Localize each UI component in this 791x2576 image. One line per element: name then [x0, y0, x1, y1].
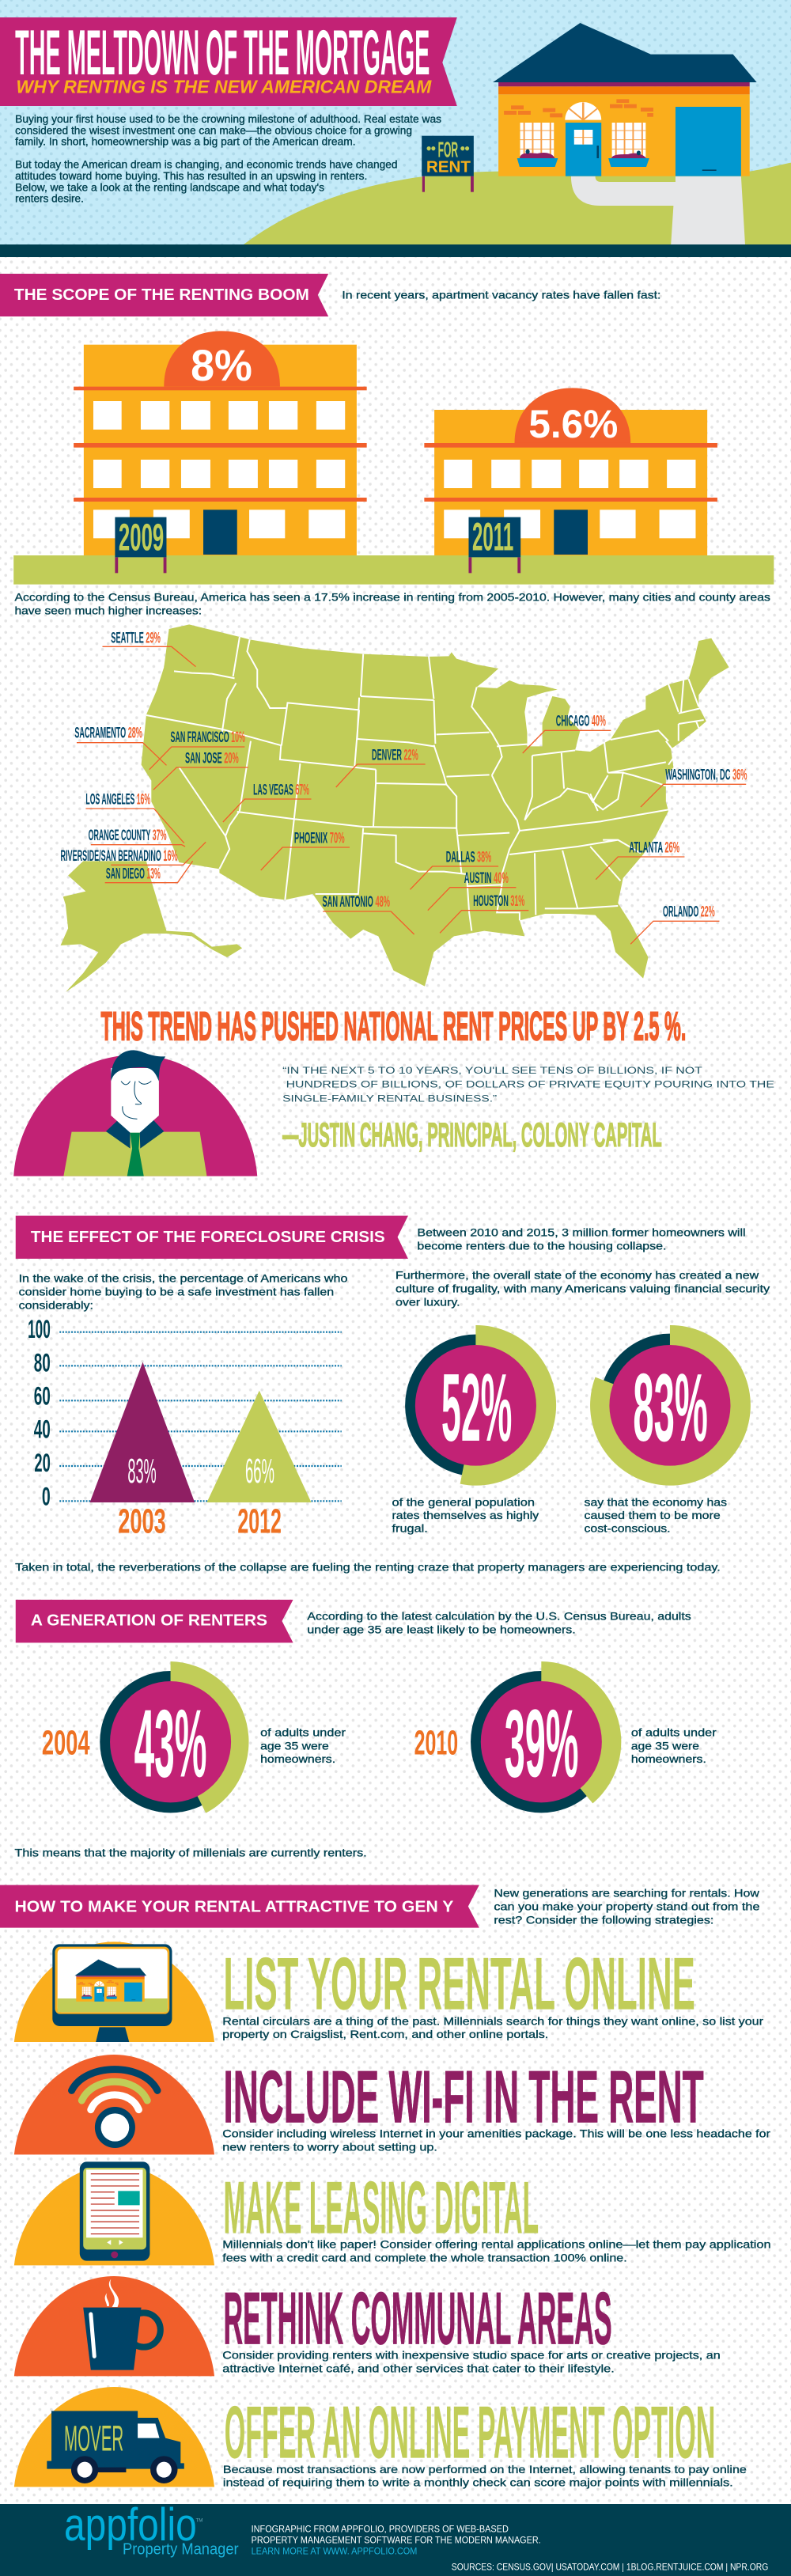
icon: mover truck: MOVER [64, 2418, 123, 2458]
chart: safe investment triangles: 80 [34, 1348, 51, 1377]
footer: Property Manager [123, 2540, 239, 2558]
intro text: attitudes toward home buying. This has resulted in an upswing in renters. [15, 170, 367, 182]
strategy 5 [14, 2387, 747, 2489]
label: San Francisco [149, 729, 245, 770]
intro text: Below, we take a look at the renting landscape and what today's [15, 182, 324, 194]
chart: safe investment triangles: 40 [34, 1415, 51, 1444]
triangle: 2003: 2003 [118, 1502, 166, 1540]
triangle: 2012 [206, 1391, 311, 1540]
caption: 52%: of the general population [392, 1497, 535, 1509]
building: 2011 [424, 388, 717, 573]
quote: SINGLE-FAMILY RENTAL BUSINESS.” [282, 1093, 497, 1104]
chart: safe investment triangles: 0 [42, 1482, 51, 1511]
caption: 2010: age 35 were [631, 1741, 699, 1752]
label: Dallas [410, 848, 498, 889]
intro text [15, 113, 441, 205]
panel: map of renting increases: DALLAS 38% [446, 848, 491, 866]
icon: house [493, 23, 757, 176]
strategy 3 [14, 2161, 770, 2265]
map: contiguous US [142, 624, 729, 987]
logo: AppFolio: appfolio [64, 2498, 197, 2550]
label: Los Angeles [85, 790, 184, 843]
label: Las Vegas [223, 781, 311, 822]
panel: map of renting increases: ATLANTA 26% [629, 839, 679, 856]
panel: map of renting increases: CHICAGO 40% [556, 713, 606, 729]
panel: map of renting increases: LOS ANGELES 16% [85, 790, 150, 808]
strategy 1 [14, 1941, 763, 2042]
panel: how to make your rental attractive [0, 1885, 770, 2265]
donut: 39% [471, 1661, 621, 1813]
sky background [0, 0, 791, 244]
panel: map of renting increases: DENVER 22% [372, 747, 418, 763]
census text [14, 592, 770, 617]
ground [13, 555, 774, 585]
y axis labels [28, 1315, 51, 1511]
caption: 2010: of adults under [631, 1727, 717, 1739]
credit text: INFOGRAPHIC FROM APPFOLIO, PROVIDERS OF WEB-BASED [252, 2524, 509, 2534]
panel: map of renting increases: ORANGE COUNTY 37% [89, 827, 166, 844]
for rent sign: RENT [426, 157, 471, 176]
map: Alaska [61, 861, 242, 992]
label: Sacramento [74, 725, 166, 765]
label: Orange County [89, 827, 185, 847]
description [222, 2350, 721, 2375]
panel: a generation of renters [14, 1600, 717, 1859]
panel: map of renting increases: AUSTIN 40% [464, 869, 509, 887]
panel: map of renting increases: PHOENIX 70% [294, 829, 345, 847]
chart: safe investment triangles: 100 [28, 1315, 51, 1343]
label: Seattle: SEATTLE 29% [111, 630, 161, 646]
intro text: renters desire. [15, 193, 84, 205]
intro text [417, 1227, 746, 1252]
footer [0, 2498, 791, 2576]
caption: 52% [392, 1497, 539, 1535]
icon: monitor [14, 1941, 214, 2042]
label: Houston [440, 892, 528, 933]
caption: 2004: homeowners. [260, 1753, 335, 1765]
label: San Jose [153, 749, 248, 790]
description: new renters to worry about setting up. [222, 2142, 437, 2154]
for rent sign [422, 136, 474, 192]
frugality text [396, 1270, 770, 1309]
building: 2009: 2009 [119, 516, 164, 559]
triangle: 2003: 83% [127, 1452, 157, 1491]
panel: map of renting increases: SAN FRANCISCO 10% [171, 729, 245, 746]
label: Denver [336, 747, 426, 787]
chart text [19, 1273, 347, 1312]
intro text [494, 1888, 760, 1926]
description [222, 2016, 763, 2040]
label: Atlanta [596, 839, 684, 880]
panel: rent prices and quote [13, 1003, 774, 1176]
chart: safe investment triangles: 60 [34, 1381, 51, 1411]
sign: 2011 [468, 515, 520, 573]
intro text: family. In short, homeownership was a big part of the American dream. [15, 136, 356, 148]
panel: the scope of the renting boom [0, 274, 774, 617]
label: Orlando [630, 903, 719, 944]
icon: wi-fi [14, 2055, 214, 2154]
caption: 2004: age 35 were [260, 1741, 329, 1752]
logo: AppFolio [64, 2498, 239, 2558]
heading banner: THE EFFECT OF THE FORECLOSURE CRISIS [31, 1227, 385, 1246]
stat: 8%: 8% [191, 341, 252, 390]
heading banner: THE SCOPE OF THE RENTING BOOM [14, 285, 309, 304]
icon: tablet [14, 2161, 214, 2265]
building: 2009 [74, 331, 367, 573]
chart text: considerably: [19, 1300, 93, 1312]
description [223, 2464, 747, 2489]
heading banner [0, 274, 328, 316]
donut: 83% [590, 1325, 751, 1486]
credit text [252, 2524, 541, 2556]
strategy 2 [14, 2055, 770, 2154]
intro text [307, 1611, 691, 1636]
panel: map of renting increases: HOUSTON 31% [473, 892, 524, 910]
label: Austin [428, 869, 516, 911]
description [222, 2239, 770, 2264]
panel: map of renting increases: RIVERSIDE/SAN BERNADINO 16% [61, 847, 177, 865]
caption: 83%: cost-conscious. [585, 1523, 671, 1535]
donut: 43% [100, 1661, 249, 1813]
label: Washington, DC [641, 766, 747, 807]
title banner [0, 17, 457, 106]
caption: 52%: rates themselves as highly [392, 1510, 539, 1521]
strategy 4 [14, 2276, 721, 2376]
chart: safe investment triangles: 2012 [237, 1502, 282, 1540]
icon: coffee mug [14, 2276, 214, 2376]
hill [244, 163, 791, 244]
intro text: But today the American dream is changing, and economic trends have changed [15, 159, 398, 171]
logo: AppFolio: TM [195, 2517, 202, 2523]
label: San Diego [105, 861, 193, 883]
panel: header: FOR [438, 137, 458, 162]
chart: safe investment triangles: 66% [245, 1452, 274, 1491]
heading banner: A GENERATION OF RENTERS [31, 1611, 267, 1629]
chart: safe investment triangles [28, 1315, 342, 1540]
description: property on Craigslist, Rent.com, and other online portals. [222, 2029, 548, 2040]
building: 2011: 2011 [472, 515, 513, 559]
panel: map of renting increases: LAS VEGAS 67% [253, 781, 309, 798]
panel: header [0, 17, 791, 244]
chart text: consider home buying to be a safe investment has fallen [19, 1286, 334, 1298]
panel: a generation of renters: 2010 [414, 1723, 458, 1762]
footpath [571, 176, 745, 244]
frugality text: over luxury. [396, 1297, 460, 1309]
quote [282, 1065, 774, 1104]
sign: 2009 [115, 516, 166, 573]
description [222, 2128, 770, 2154]
label: Chicago [523, 713, 611, 753]
census text: have seen much higher increases: [14, 605, 202, 617]
panel: map of renting increases [61, 624, 747, 992]
caption: 2010 [631, 1727, 717, 1765]
label: Phoenix [261, 829, 350, 870]
label: San Diego: SAN DIEGO 13% [106, 866, 161, 882]
panel: a generation of renters: 2004 [42, 1723, 90, 1762]
caption: 2004 [260, 1727, 346, 1765]
panel: map of renting increases: SAN ANTONIO 48% [323, 893, 390, 911]
panel: the effect of the foreclosure crisis [15, 1216, 770, 1574]
panel: map of renting increases: SAN JOSE 20% [185, 749, 239, 767]
heading banner [16, 1216, 408, 1259]
stat: 5.6%: 5.6% [528, 402, 618, 446]
caption: 2004: of adults under [260, 1727, 346, 1739]
footer bar of header [0, 244, 791, 257]
heading banner [0, 1885, 479, 1928]
triangle: 2003 [90, 1362, 195, 1540]
label: San Antonio [323, 893, 414, 934]
label: Seattle [102, 630, 195, 667]
conclusion text: This means that the majority of millenials are currently renters. [14, 1847, 367, 1859]
caption: 52%: frugal. [392, 1523, 428, 1535]
panel: strategies continued [0, 2276, 791, 2576]
caption: 83% [585, 1497, 727, 1535]
label: Riverside/San Bernadino [61, 842, 206, 865]
intro text: considered the wisest investment one can make—the obvious choice for a growing [15, 125, 412, 137]
intro text: under age 35 are least likely to be homeowners. [307, 1624, 576, 1636]
chart: safe investment triangles: 20 [34, 1449, 51, 1477]
chart text: In the wake of the crisis, the percentage of Americans who [19, 1273, 347, 1285]
illustration: businessman [13, 1050, 257, 1176]
panel: map of renting increases: SACRAMENTO 28% [74, 725, 142, 741]
donut: 52% [405, 1325, 556, 1486]
credit text: LEARN MORE AT WWW. APPFOLIO.COM [252, 2546, 417, 2556]
panel: a generation of renters: 43% [134, 1689, 206, 1798]
icon: mover truck [14, 2387, 214, 2487]
heading banner [16, 1600, 293, 1642]
caption: 2010: homeowners. [631, 1753, 706, 1765]
